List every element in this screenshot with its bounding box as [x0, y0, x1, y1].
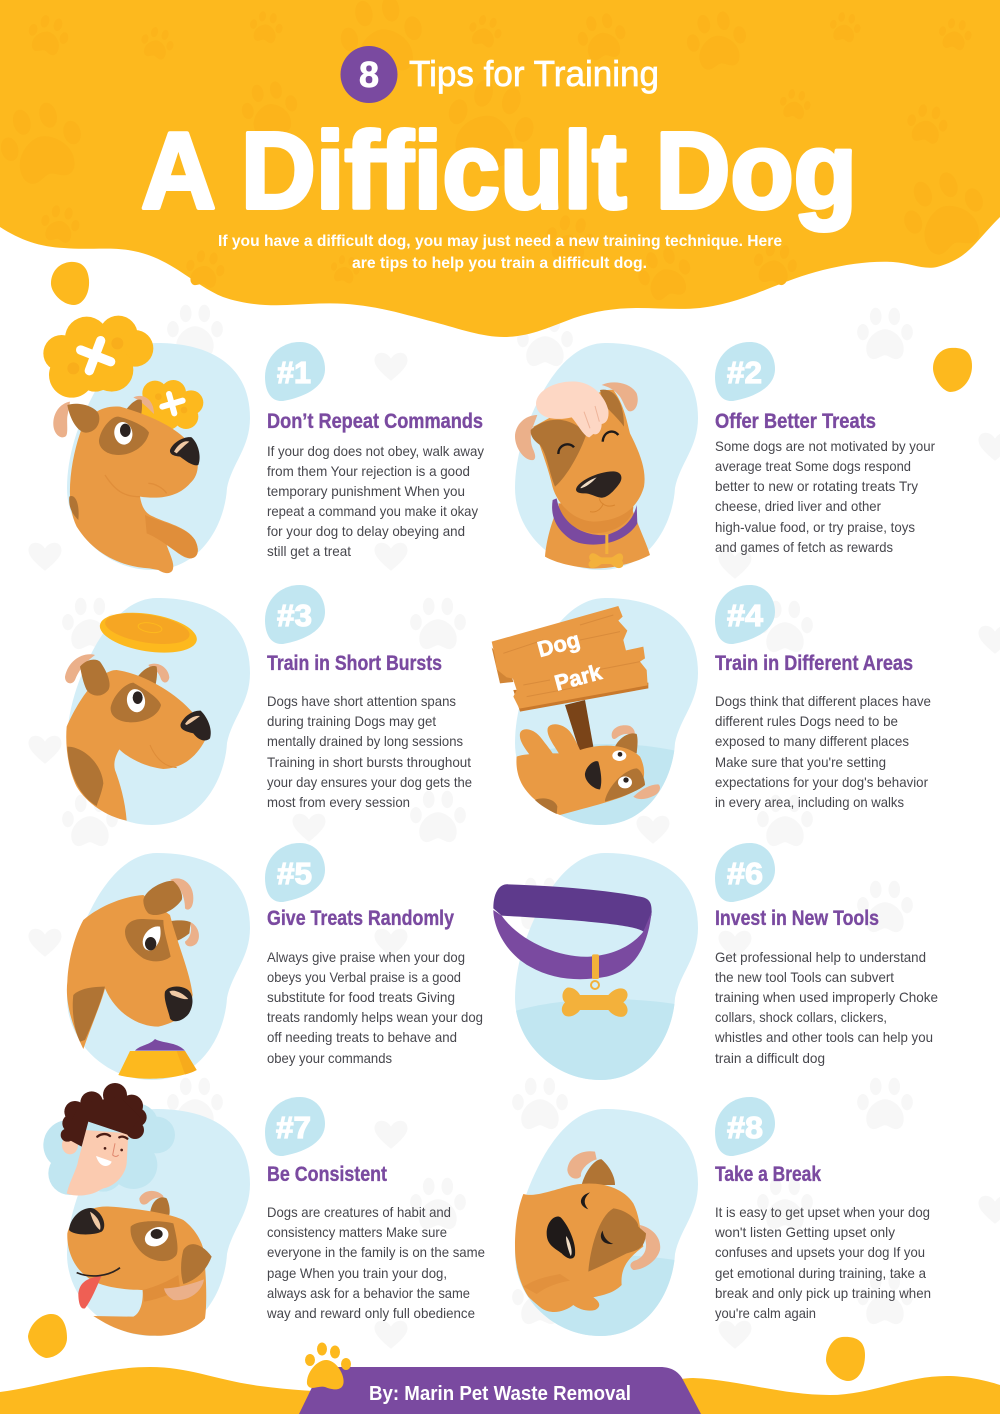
body text 1: If your dog does not obey, walk away: [267, 443, 484, 459]
body text 7: everyone in the family is on the same: [267, 1244, 485, 1260]
body text 1: for your dog to delay obeying and: [267, 523, 465, 539]
illustration: confused dog with thought clouds: [43, 316, 250, 573]
panel: tip 2: [515, 342, 935, 570]
body text 5: substitute for food treats Giving: [267, 989, 455, 1005]
body text 4: Make sure that you're setting: [715, 754, 886, 770]
body text 8: confuses and upsets your dog If you: [715, 1244, 925, 1260]
panel: tip 1: [43, 316, 484, 573]
body text 3: Training in short bursts throughout: [267, 754, 471, 770]
body text 2: cheese, dried liver and other: [715, 498, 881, 514]
body text 6: training when used improperly Choke: [715, 989, 938, 1005]
body text 3: most from every session: [267, 794, 410, 810]
title: A Difficult Dog: A Difficult Dog: [141, 110, 857, 232]
body text 6: Get professional help to understand: [715, 949, 926, 965]
number badge 3: #3: [277, 598, 312, 633]
body text 5: Always give praise when your dog: [267, 949, 465, 965]
panel: tip 8: [515, 1097, 931, 1336]
body text 3: Dogs have short attention spans: [267, 693, 456, 709]
panel: tip 5: [67, 843, 483, 1080]
body text 3: mentally drained by long sessions: [267, 733, 463, 749]
panel: tip 6: [493, 843, 938, 1080]
illustration: smiling man and dog: [43, 1083, 250, 1336]
heading 7: Be Consistent: [267, 1163, 387, 1186]
icon: footer paw: [305, 1342, 351, 1389]
body text 6: the new tool Tools can subvert: [715, 969, 894, 985]
heading 5: Give Treats Randomly: [267, 907, 454, 930]
footer credit tab: By: Marin Pet Waste Removal: [369, 1383, 631, 1405]
illustration: purple collar with bone tag: [493, 853, 698, 1080]
body text 7: Dogs are creatures of habit and: [267, 1204, 451, 1220]
subtitle: Tips for Training: Tips for Training: [409, 53, 659, 94]
illustration: dog park sign and dog: [492, 598, 698, 825]
illustration: dog park sign and dog: Dog: [535, 627, 583, 662]
body text 2: [715, 438, 935, 555]
intro text: are tips to help you train a difficult dog.: [352, 255, 647, 272]
body text 7: way and reward only full obedience: [266, 1305, 475, 1321]
number badge 2: [715, 342, 775, 401]
panel: tip 7: [43, 1083, 485, 1336]
body text 1: [267, 443, 484, 559]
body text 4: exposed to many different places: [715, 733, 909, 749]
body text 3: [267, 693, 472, 810]
body text 6: whistles and other tools can help you: [714, 1029, 933, 1045]
heading 4: Train in Different Areas: [715, 652, 913, 675]
body text 2: and games of fetch as rewards: [715, 539, 893, 555]
heading 1: Don’t Repeat Commands: [267, 410, 483, 433]
body text 1: from them Your rejection is a good: [267, 463, 470, 479]
number badge 2: #2: [727, 355, 762, 390]
decorative yellow blobs: [28, 262, 972, 1381]
body text 8: won't listen Getting upset only: [714, 1224, 895, 1240]
heading 2: Offer Better Treats: [715, 410, 876, 433]
illustration: dog being petted: [515, 343, 698, 570]
footer credit tab: [299, 1367, 701, 1414]
body text 4: in every area, including on walks: [715, 794, 904, 810]
heading 6: Invest in New Tools: [715, 907, 879, 930]
number badge 4: [715, 585, 775, 644]
body text 3: during training Dogs may get: [267, 713, 436, 729]
number badge 1: #1: [277, 355, 311, 390]
title badge: number 8: 8: [359, 54, 379, 95]
body text 6: train a difficult dog: [715, 1050, 825, 1066]
body text 4: different rules Dogs need to be: [715, 713, 898, 729]
footer wave: [0, 1367, 1000, 1414]
header wave background: [0, 0, 1000, 337]
number badge 3: [265, 585, 325, 644]
body text 2: Some dogs are not motivated by your: [715, 438, 935, 454]
intro text: [218, 233, 782, 272]
background pattern: faint paws and hearts: [28, 305, 1000, 1349]
body text 8: It is easy to get upset when your dog: [715, 1204, 930, 1220]
panel: tip 3: [65, 585, 472, 825]
body text 7: page When you train your dog,: [267, 1265, 447, 1281]
body text 2: average treat Some dogs respond: [715, 458, 911, 474]
body text 6: [714, 949, 938, 1066]
number badge 7: [265, 1097, 325, 1156]
number badge 8: [715, 1097, 775, 1156]
body text 2: better to new or rotating treats Try: [715, 478, 918, 494]
body text 8: break and only pick up training when: [715, 1285, 931, 1301]
body text 1: still get a treat: [267, 543, 351, 559]
body text 5: obey your commands: [267, 1050, 392, 1066]
number badge 5: #5: [277, 856, 312, 891]
body text 4: [715, 693, 931, 810]
number badge 1: [265, 342, 325, 401]
heading 8: Take a Break: [715, 1163, 821, 1186]
header paw pattern: [0, 0, 995, 304]
number badge 5: [265, 843, 325, 902]
body text 1: repeat a command you make it okay: [267, 503, 478, 519]
panel: tip 4: [492, 585, 931, 825]
illustration: dog looking at food bowl: [67, 853, 250, 1080]
body text 8: you're calm again: [715, 1305, 816, 1321]
body text 5: off needing treats to behave and: [267, 1029, 457, 1045]
heading 3: Train in Short Bursts: [267, 652, 442, 675]
body text 2: high-value food, or try praise, toys: [715, 519, 915, 535]
illustration: dog park sign and dog: Park: [552, 659, 605, 696]
number badge 8: #8: [727, 1110, 763, 1145]
body text 7: consistency matters Make sure: [267, 1224, 447, 1240]
number badge 4: #4: [727, 598, 764, 633]
body text 1: temporary punishment When you: [267, 483, 465, 499]
body text 8: get emotional during training, take a: [715, 1265, 926, 1281]
body text 7: always ask for a behavior the same: [267, 1285, 470, 1301]
body text 5: obeys you Verbal praise is a good: [267, 969, 461, 985]
body text 5: [267, 949, 483, 1066]
body text 8: [714, 1204, 931, 1321]
body text 4: Dogs think that different places have: [715, 693, 931, 709]
number badge 6: [715, 843, 775, 902]
body text 5: treats randomly helps wean your dog: [267, 1009, 483, 1025]
title badge: number 8: [340, 46, 398, 103]
body text 3: your day ensures your dog gets the: [267, 774, 472, 790]
body text 4: expectations for your dog's behavior: [715, 774, 928, 790]
number badge 7: #7: [276, 1110, 311, 1145]
body text 7: [266, 1204, 485, 1321]
body text 6: collars, shock collars, clickers,: [715, 1009, 887, 1025]
illustration: dog and frisbee: [65, 598, 250, 825]
illustration: sleeping dog: [515, 1109, 698, 1336]
number badge 6: #6: [727, 856, 763, 891]
intro text: If you have a difficult dog, you may just need a new training technique. Here: [218, 233, 782, 250]
